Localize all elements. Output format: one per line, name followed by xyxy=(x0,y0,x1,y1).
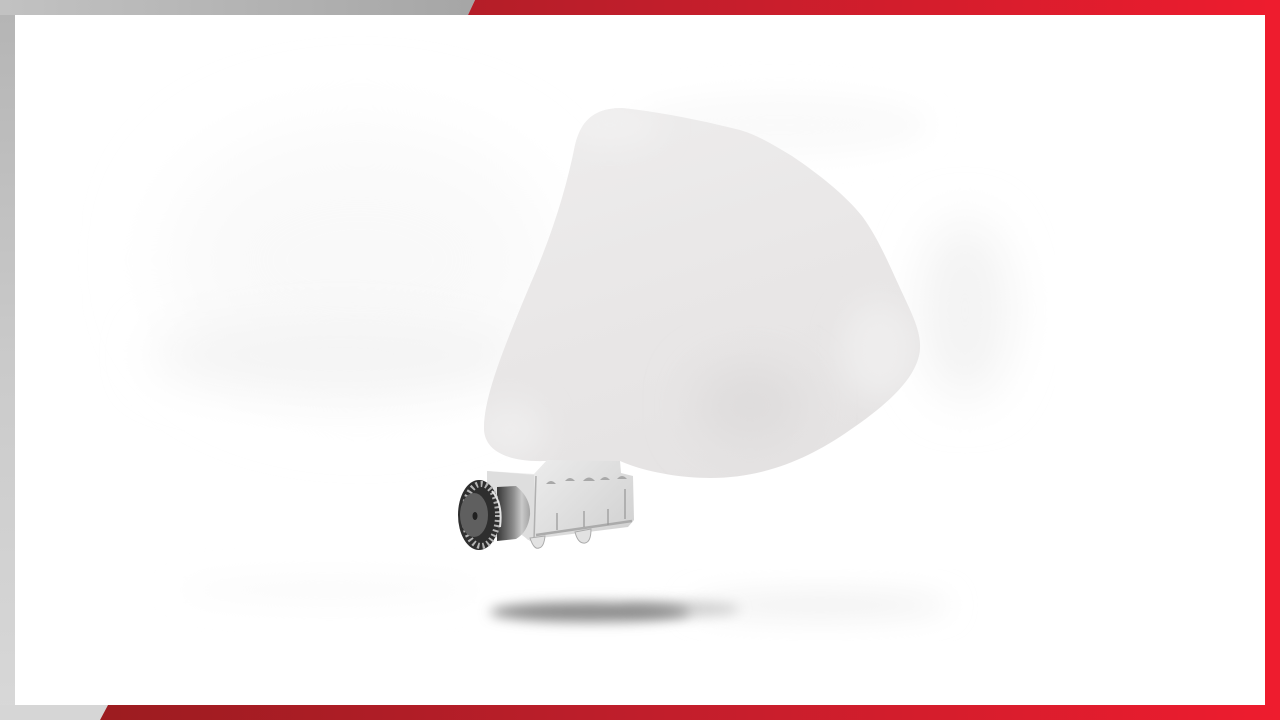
soft background haze xyxy=(150,95,1010,604)
frame: grey top edge xyxy=(0,0,475,15)
hub xyxy=(497,486,530,541)
airbag cushion xyxy=(475,103,920,478)
module bumps xyxy=(546,476,627,484)
frame: red top edge xyxy=(468,0,1280,15)
floor shadow xyxy=(490,593,950,622)
frame: grey left edge xyxy=(0,0,15,720)
inflator module xyxy=(458,460,634,550)
frame: red bottom edge xyxy=(100,705,1280,720)
frame: grey bottom edge xyxy=(0,705,108,720)
module housing xyxy=(487,460,634,541)
frame: red right edge xyxy=(1265,0,1280,720)
wheel xyxy=(458,480,500,550)
